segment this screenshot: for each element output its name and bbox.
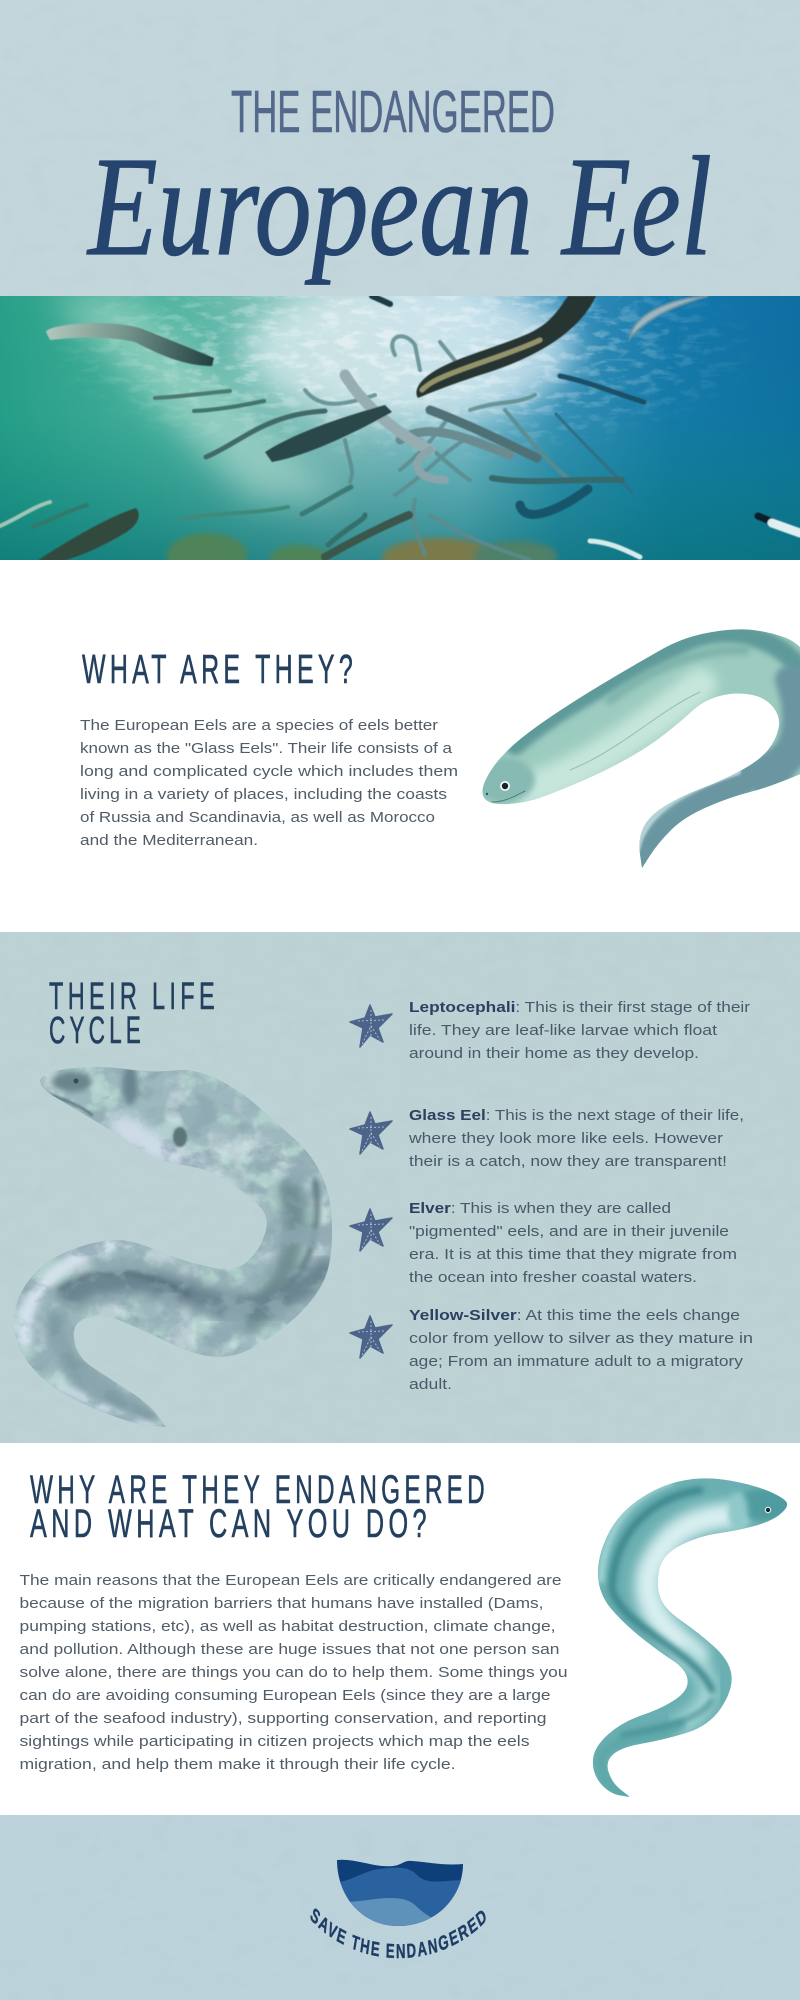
panel: life cycle [0, 932, 800, 1443]
list: glass eel: where they look more like eels. However [408, 1130, 723, 1147]
title: Eel [560, 127, 712, 285]
text block: sightings while participating in citizen projects which map the eels [20, 1733, 530, 1750]
logo: water bowl [337, 1860, 463, 1926]
text block: and the Mediterranean. [80, 832, 258, 849]
list: yellow-silver [350, 1307, 753, 1393]
icon: eel illustration [482, 629, 800, 868]
list: glass eel: their is a catch, now they are transparent! [409, 1153, 727, 1170]
list: yellow-silver: color from yellow to silver as they mature in [409, 1330, 753, 1347]
text block: can do are avoiding consuming European Eels (since they are a large [20, 1687, 550, 1704]
list: glass eel [350, 1107, 744, 1170]
text block [80, 717, 458, 849]
text block: of Russia and Scandinavia, as well as Morocco [80, 809, 435, 826]
text block: migration, and help them make it through their life cycle. [20, 1756, 455, 1773]
panel: what are they [80, 629, 800, 868]
list: yellow-silver: Yellow-Silver : At this time the eels change [409, 1307, 740, 1324]
logo: curved text: SAVE THE ENDANGERED [310, 1908, 486, 1958]
text block: part of the seafood industry), supporting conservation, and reporting [20, 1710, 546, 1727]
title: European [86, 127, 533, 285]
heading: THEIR LIFE [49, 976, 219, 1018]
text block: living in a variety of places, including the coasts [80, 786, 447, 803]
eels [0, 296, 800, 562]
text block: pumping stations, etc), as well as habitat destruction, climate change, [20, 1618, 556, 1635]
text block [20, 1572, 568, 1773]
heading: AND WHAT CAN YOU DO? [30, 1502, 431, 1546]
eel eye [486, 781, 525, 802]
text block: because of the migration barriers that humans have installed (Dams, [20, 1595, 544, 1612]
text block: The main reasons that the European Eels are critically endangered are [20, 1572, 562, 1589]
list: elver: the ocean into fresher coastal waters. [409, 1269, 697, 1286]
list: leptocephali: Leptocephali : This is their first stage of their [409, 999, 750, 1016]
heading [49, 976, 219, 1052]
list: glass eel: Glass Eel : This is the next stage of their life, [409, 1107, 744, 1124]
photo: underwater eels [0, 296, 800, 560]
heading [30, 1468, 489, 1546]
subtitle: THE ENDANGERED [231, 79, 555, 145]
panel: footer [0, 1815, 800, 2000]
text block: The European Eels are a species of eels better [80, 717, 438, 734]
list: leptocephali: life. They are leaf-like larvae which float [409, 1022, 718, 1039]
seaweed [164, 530, 560, 560]
list: elver: era. It is at this time that they migrate from [409, 1246, 737, 1263]
text block: and pollution. Although these are huge issues that not one person san [20, 1641, 560, 1658]
panel: why endangered [20, 1474, 788, 1797]
heading: WHY ARE THEY ENDANGERED [30, 1468, 489, 1512]
text block: known as the "Glass Eels". Their life consists of a [80, 740, 453, 757]
list: yellow-silver: adult. [409, 1376, 452, 1393]
list: leptocephali [350, 999, 750, 1062]
eel eye [765, 1507, 771, 1513]
list: elver: "pigmented" eels, and are in their juvenile [409, 1223, 729, 1240]
text block: solve alone, there are things you can do to help them. Some things you [20, 1664, 568, 1681]
icon: watercolor eel [14, 1066, 332, 1427]
heading: CYCLE [49, 1010, 145, 1052]
list: yellow-silver: age; From an immature adult to a migratory [409, 1353, 744, 1370]
panel: header [0, 0, 800, 296]
icon: teal eel illustration [592, 1478, 788, 1797]
list: elver: Elver : This is when they are called [409, 1200, 671, 1217]
list: leptocephali: around in their home as they develop. [409, 1045, 699, 1062]
list: elver [350, 1200, 737, 1286]
text block: long and complicated cycle which includes them [80, 763, 458, 780]
heading: WHAT ARE THEY? [82, 646, 357, 692]
